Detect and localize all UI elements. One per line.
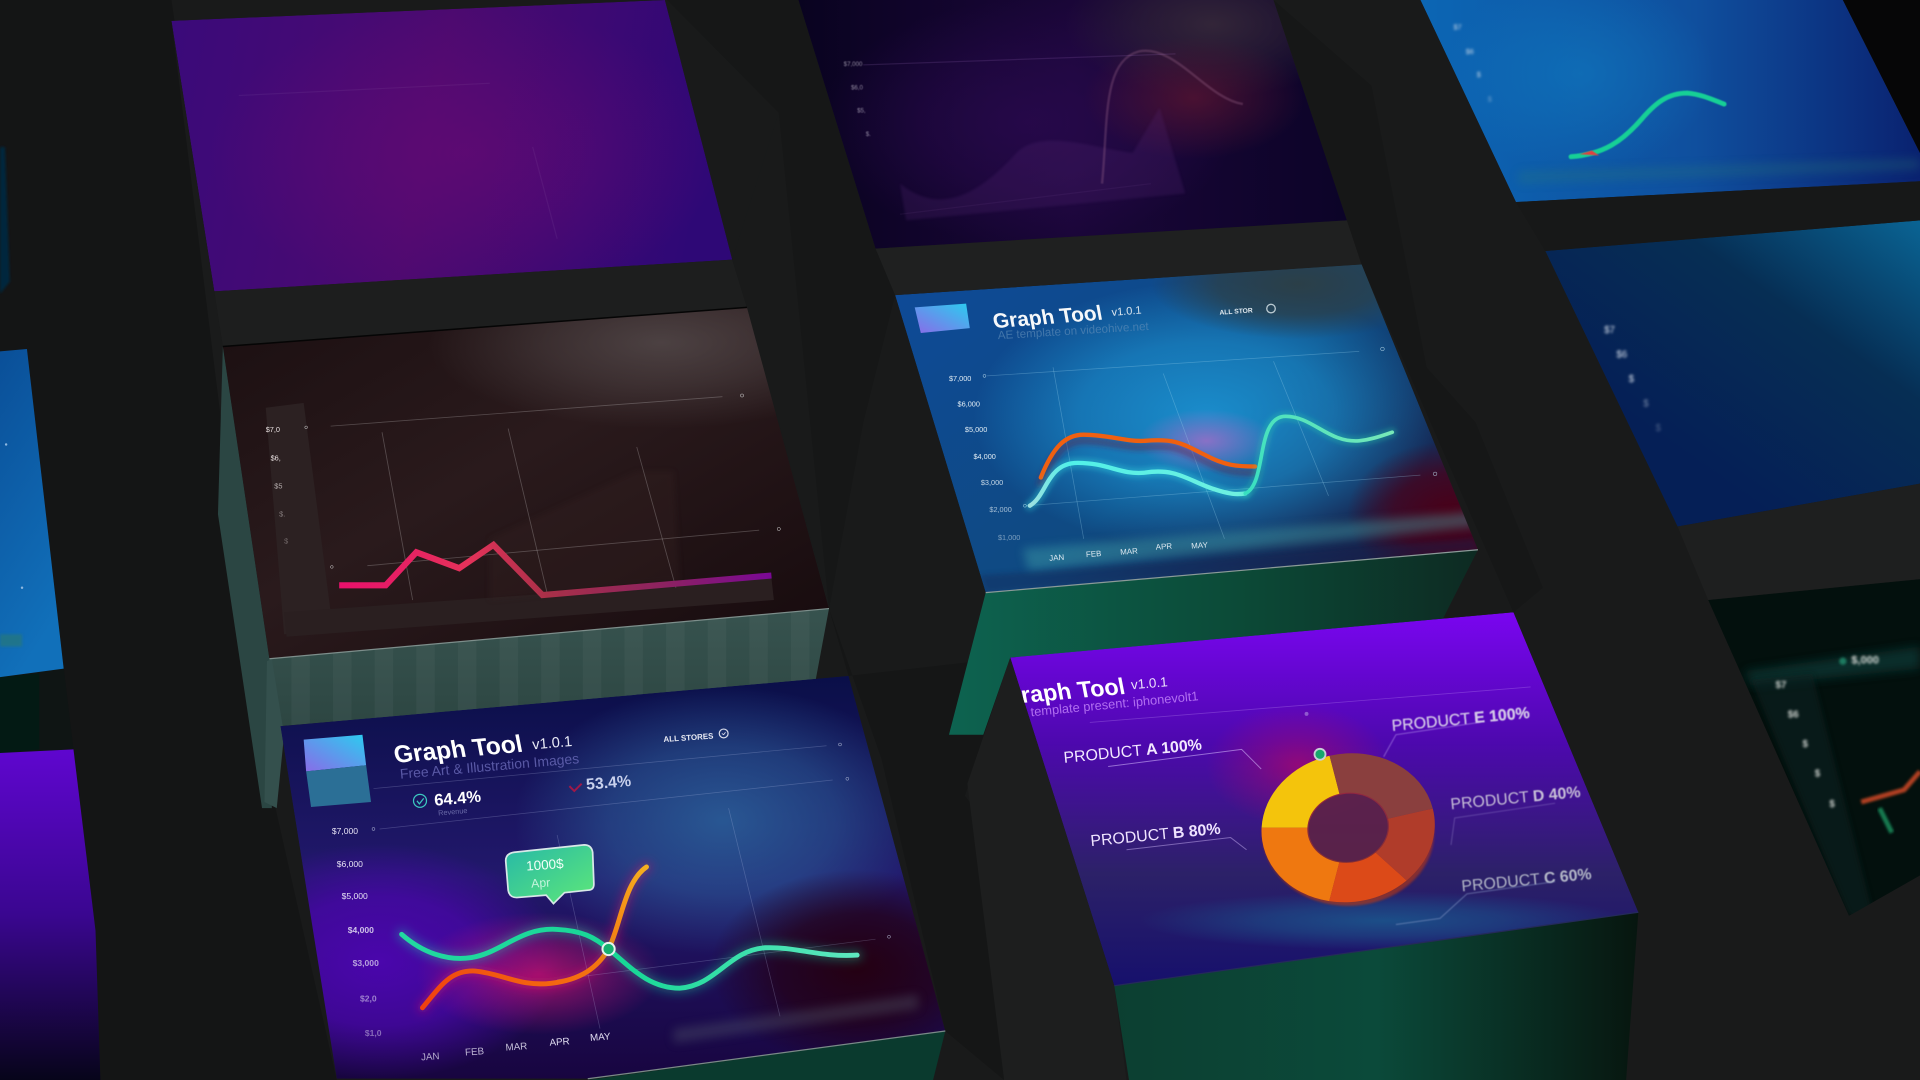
callout: product E: PRODUCT E 100% [1391,705,1530,735]
y-axis labels: $. [279,510,285,519]
panel: top-center dark purple chart [798,0,1359,249]
panel: top-left purple [171,0,732,300]
grid lines [987,351,1420,539]
panel: purple donut chart [1010,612,1638,986]
version: v1.0.1 [1130,674,1168,692]
curve [1571,93,1724,157]
x-axis labels [1049,542,1208,561]
side face: green under front panel [588,1031,945,1080]
panel: left edge blue [0,349,64,677]
stat: revenue: 64.4% [433,787,482,810]
pink line [339,545,771,595]
y-axis labels: $ [1477,70,1481,79]
y-axis labels: $7,000 [949,374,971,383]
y-axis labels: $6,000 [958,400,980,409]
y-axis labels: $7 [1776,680,1787,691]
stat: second [568,775,631,792]
x-axis labels: JAN [421,1051,440,1063]
y-axis labels: $6 [1616,350,1628,361]
stat: revenue: Revenue [438,806,468,818]
panel: top-right blue chart [1420,0,1920,202]
x-axis labels: FEB [465,1046,485,1059]
y-axis labels [1776,680,1835,810]
orange curve [422,867,647,1008]
x-axis labels: MAY [590,1031,611,1044]
stat: revenue [412,790,481,816]
crossing marker [602,943,615,955]
curve [1102,51,1243,184]
y-axis labels: $6,000 [337,859,363,869]
x-axis labels: MAR [1120,546,1138,557]
y-axis labels: $ [1488,95,1492,104]
title: Graph Tool [391,731,525,769]
version: v1.0.1 [532,734,573,753]
y-axis labels: $6 [1788,710,1799,721]
y-axis labels: $2,0 [360,994,377,1004]
panel: front Graph Tool chart [280,676,946,1080]
store filter [663,729,728,744]
y-axis labels: $7,000 [332,826,358,836]
side face: green under donut panel [1114,912,1638,1080]
store filter [1219,304,1275,317]
y-axis labels: $3,000 [981,478,1003,487]
panel: right bottom dark green, blurred [1708,579,1920,916]
blurred line [1861,771,1920,802]
title: raph Tool [1018,673,1127,708]
header label [1839,655,1879,667]
y-axis labels: $6, [271,453,281,462]
y-axis labels: $5 [274,482,282,491]
y-axis labels [1604,325,1662,434]
panel: dark line chart [222,306,829,660]
green curve [1245,416,1392,493]
x-axis labels: MAY [1191,540,1209,551]
y-axis labels: $ [284,537,288,546]
x-axis labels: FEB [1086,549,1102,559]
cyan curve [1030,463,1245,506]
panel: left edge purple [0,749,100,1080]
y-axis labels: $6,0 [851,84,864,91]
store filter: ALL STOR [1219,307,1253,317]
side face: green under blue panel [949,550,1478,735]
callout: product A [1063,737,1261,769]
subtitle: Free Art & Illustration Images [399,750,580,782]
x-axis labels: MAR [505,1041,528,1054]
callout: product B: PRODUCT B 80% [1090,821,1221,850]
callout: product C: PRODUCT C 60% [1461,866,1592,895]
version: v1.0.1 [1111,305,1142,319]
stat: second: 53.4% [585,773,632,794]
y-axis labels: $7,000 [844,61,863,68]
store filter: ALL STORES [663,732,714,744]
panel: left edge blue, far [0,147,10,294]
header rule [1090,687,1531,722]
y-axis labels [266,425,288,546]
donut chart [1258,749,1439,906]
y-axis labels: $4,000 [973,452,996,461]
y-axis labels: $7 [1453,22,1462,31]
panel: blue Graph Tool chart [895,264,1478,594]
y-axis labels: $4,000 [348,925,374,935]
y-axis labels: $7 [1604,325,1615,336]
grid lines [331,397,759,600]
y-axis labels: $7,0 [266,425,280,434]
orange curve [1041,435,1255,484]
panel: right mid dark blue, blurred [1545,220,1920,527]
tooltip bubble: 1000$ [526,856,565,874]
y-axis labels: $5,000 [965,425,987,434]
x-axis labels [421,1032,610,1060]
y-axis labels: $ [1829,799,1835,810]
y-axis labels: $ [1629,374,1635,385]
y-axis labels: $6 [1466,47,1474,56]
callout: product C [1396,866,1592,924]
callout: product D: PRODUCT D 40% [1450,784,1581,813]
y-axis labels [844,61,871,138]
y-axis labels [1453,22,1492,104]
y-axis labels: $2,000 [989,505,1012,514]
title: Graph Tool [991,302,1104,333]
logo [915,304,970,333]
tooltip bubble: Apr [531,875,551,891]
side face: teal under dark panel [218,347,829,808]
y-axis labels: $5,000 [342,891,368,901]
y-axis labels: $ [1815,768,1821,779]
callout: product E [1384,705,1530,757]
x-axis labels: APR [1155,542,1173,552]
callout: product A: PRODUCT A 100% [1063,737,1203,767]
y-axis labels: $. [866,131,871,138]
y-axis labels [332,826,382,1038]
y-axis labels: $3,000 [353,958,379,968]
logo [304,735,371,807]
y-axis labels [949,374,1020,542]
area shape [900,108,1185,220]
grid lines [374,746,876,1028]
header label: $,000 [1851,655,1879,667]
y-axis labels: $1,000 [998,533,1020,542]
x-axis labels: APR [549,1036,570,1049]
callout: product D [1450,784,1581,845]
y-axis labels: $ [1802,739,1808,750]
y-axis labels: $ [1643,399,1649,410]
x-axis labels: JAN [1049,553,1065,563]
y-axis labels: $5, [857,108,866,115]
y-axis labels: $1,0 [365,1028,382,1038]
y-axis labels: $ [1656,423,1662,434]
subtitle: AE template on videohive.net [997,320,1150,342]
green curve [402,929,857,988]
subtitle: template present: iphonevolt1 [1030,688,1199,719]
tooltip bubble [506,845,594,904]
